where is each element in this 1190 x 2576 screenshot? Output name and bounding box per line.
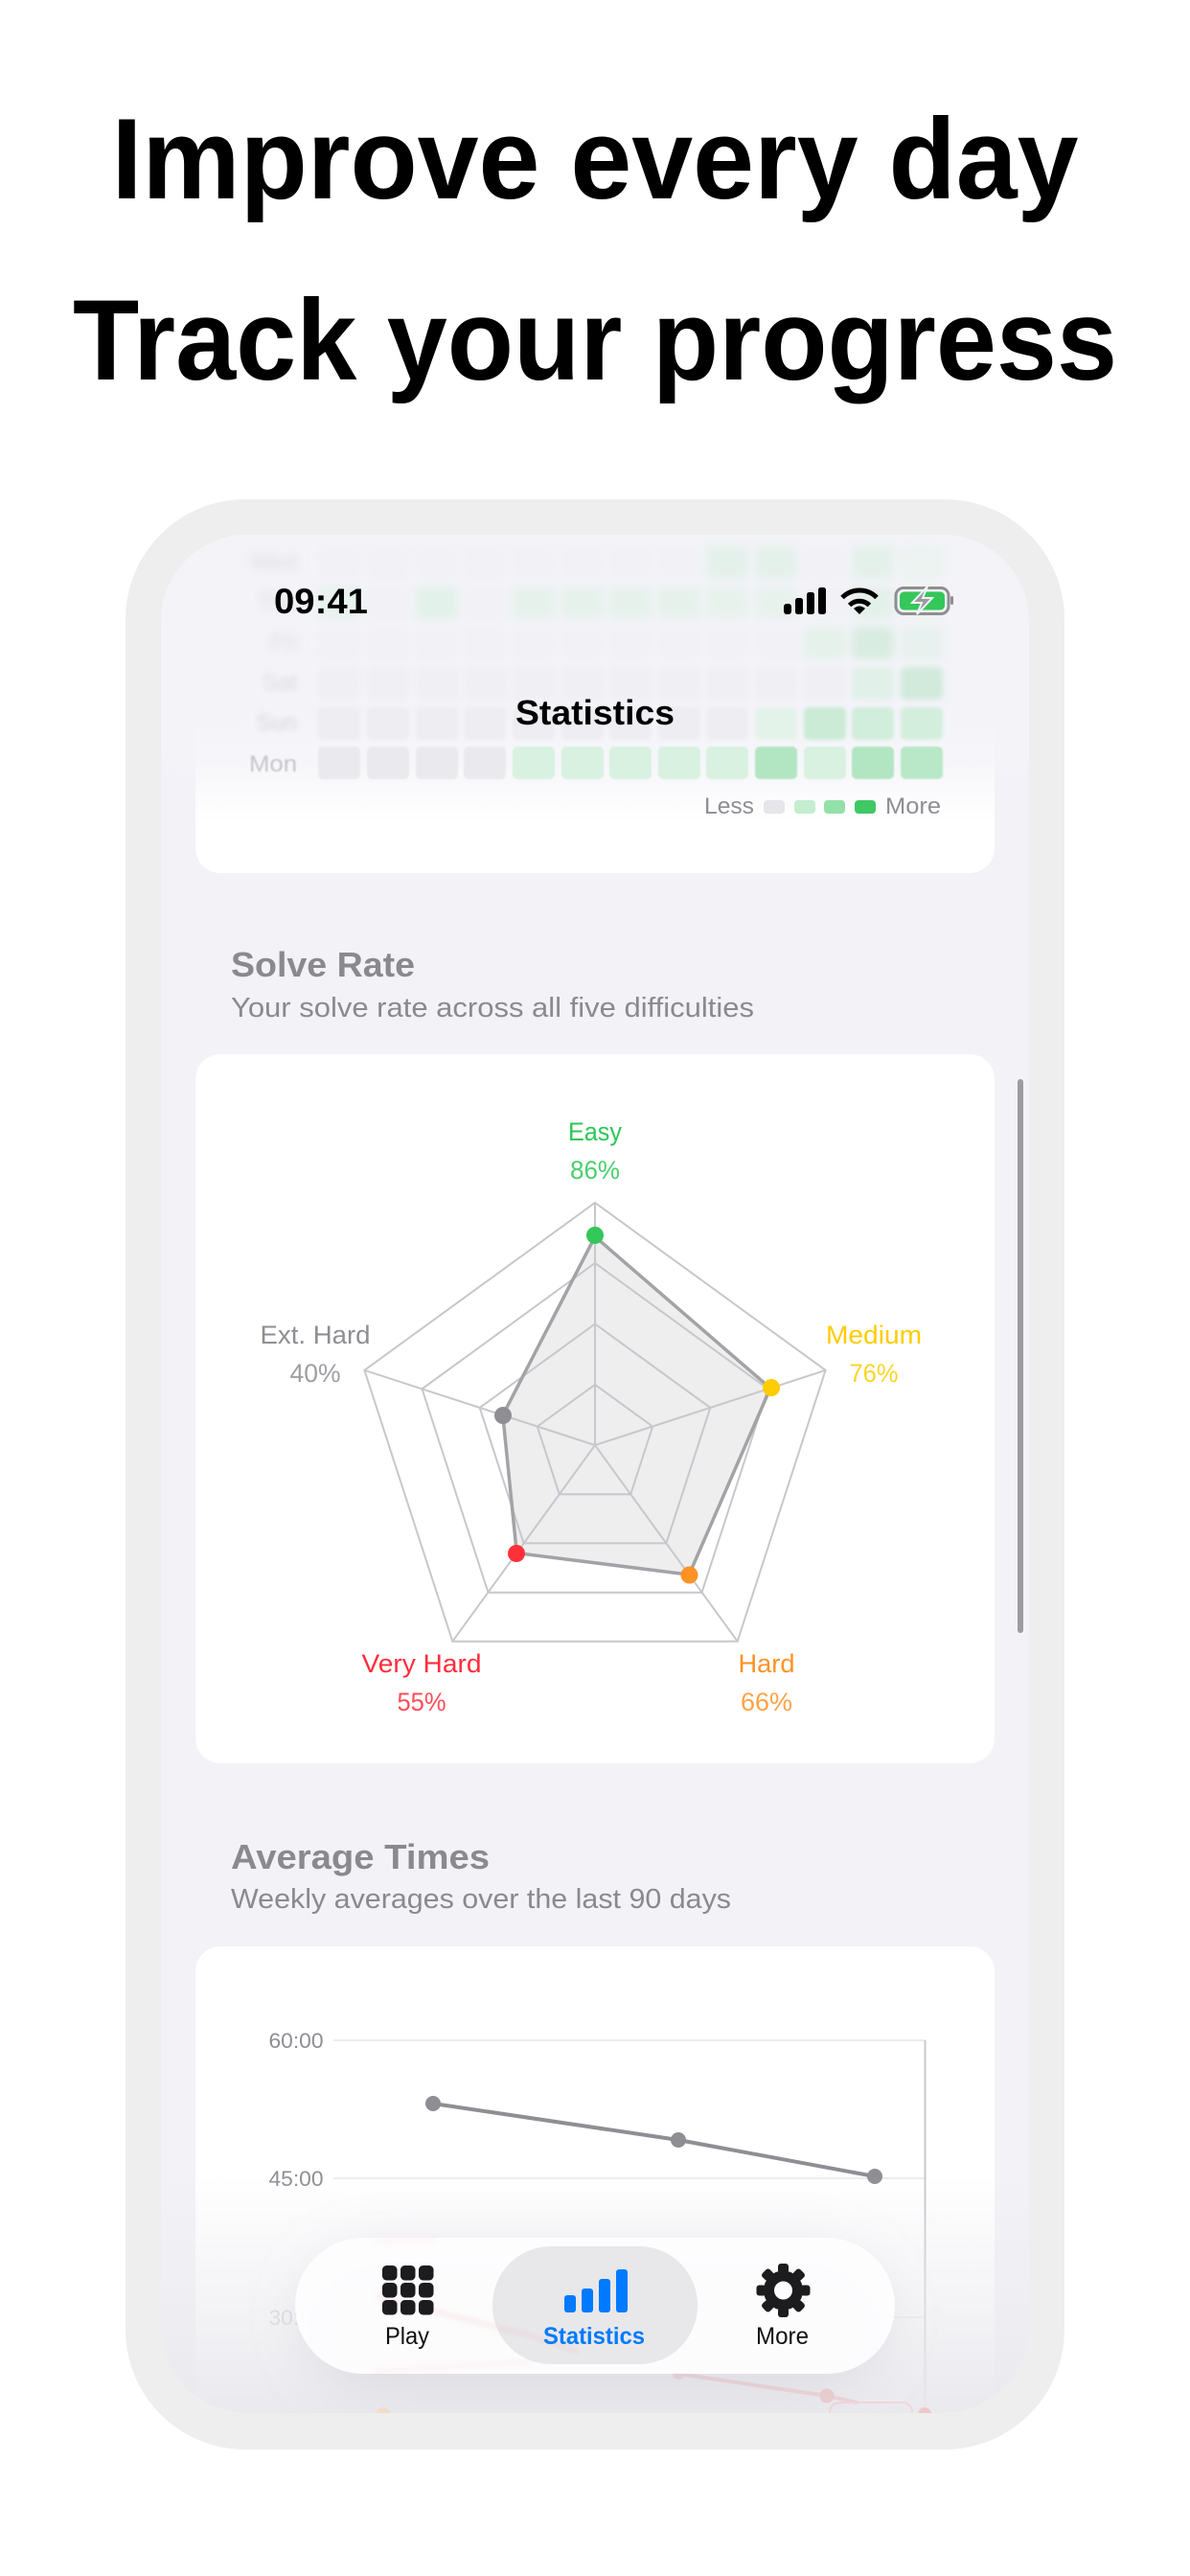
icon: wifi [842,590,877,614]
label: Ext. Hard: 40% [289,1359,341,1388]
label: Medium: Medium [826,1321,922,1349]
label: Ext. Hard: Ext. Hard [261,1321,370,1349]
tab: Statistics [543,2269,645,2350]
heatmap row: Wed: Wed [250,549,297,575]
panel: average times card [195,1946,995,2257]
radar chart [261,1117,922,1716]
label: Easy: Easy [568,1117,622,1146]
blurred red line behind tab bar [376,2240,577,2371]
radar point: Easy [586,1227,604,1244]
line chart [268,2029,926,2415]
radar point: Hard [680,1566,698,1583]
axis label 45:00: 45:00 [268,2167,324,2191]
radar point: Very Hard [508,1545,525,1562]
label: Hard: Hard [738,1649,795,1678]
tab bar [295,2238,895,2374]
heatmap label: Sun: Sun [256,710,297,736]
bottom fade overlay [189,2227,1000,2413]
top fade overlay [195,535,995,767]
axis label 60:00: 60:00 [268,2029,324,2053]
section subtitle: Average Times: Weekly averages over the last 90 days [231,1884,731,1915]
section subtitle: Solve Rate: Your solve rate across all five difficulties [231,993,754,1024]
panel: solve rate card [195,1054,995,1763]
label: Very Hard: Very Hard [362,1649,481,1678]
scrollbar [1018,1079,1023,1633]
heatmap legend [706,797,940,814]
axis label 30:00: 30:00 [268,2306,324,2330]
section heading: Solve Rate: Solve Rate [231,945,415,984]
heatmap row: Mon [249,747,943,779]
label: Easy: 86% [570,1156,620,1184]
heatmap row: Thu: Thu [258,589,297,615]
label: Medium: 76% [849,1359,899,1388]
label: Ext. Hard [263,1324,369,1382]
label: Hard [740,1654,793,1712]
phone frame [126,499,1064,2450]
tab bar shadow [322,2360,864,2390]
tab: Play [382,2266,433,2350]
headline: Improve every day: Improve every day [111,95,1079,223]
heatmap row: Sun [755,705,944,742]
label: Very Hard: 55% [397,1688,446,1716]
red series line, faded [377,2374,931,2413]
heatmap row: Wed [257,547,893,578]
heatmap row: Mon: Mon [249,751,297,777]
radar point: Medium [763,1379,780,1396]
panel: activity card [195,792,995,873]
heatmap row: Sat [263,667,943,700]
icon: signal [784,587,826,614]
status bar [274,582,953,621]
tab: Play: Play [385,2323,429,2350]
heatmap legend: Less [704,794,754,819]
tab: More: More [756,2323,809,2350]
tab: Statistics: Statistics [543,2323,645,2350]
status time: 09:41 [274,582,368,621]
label: Very Hard [362,1654,480,1712]
label: Medium [828,1324,920,1382]
heatmap [249,546,943,779]
heatmap row: Fri: Fri [270,630,297,656]
label: Easy [570,1123,622,1179]
radar data area [503,1236,770,1575]
icon: battery [896,586,953,614]
heatmap row: Thu [321,586,893,619]
heatmap legend: More [885,794,941,819]
radar point: Ext. Hard [494,1407,512,1424]
label: Hard: 66% [741,1688,792,1716]
gray series line [425,2096,882,2184]
selected tab pill [492,2246,698,2364]
phone screen [161,518,1029,2445]
headline: Track your progress: Track your progress [73,276,1117,404]
tab: More [756,2264,811,2350]
heatmap row: Sat: Sat [263,670,297,696]
heatmap row: Fri [805,625,941,661]
nav title: Statistics: Statistics [515,693,675,732]
section heading: Average Times: Average Times [231,1837,490,1876]
